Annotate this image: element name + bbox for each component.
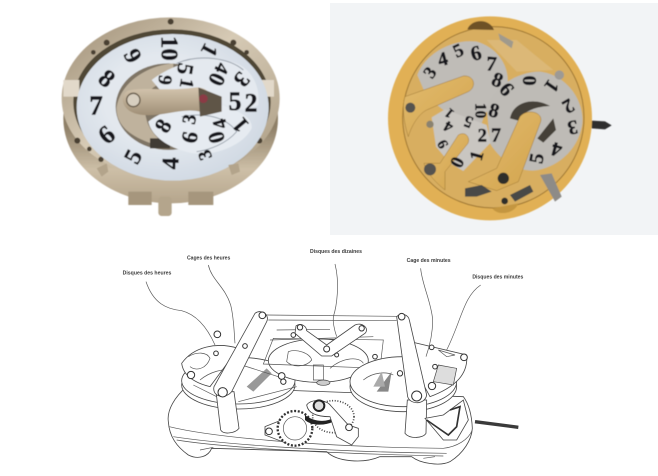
label: Disques des heures: Disques des heures (123, 271, 171, 277)
upper disc numerals: 6 (494, 79, 518, 101)
right disc numerals: 2 (558, 94, 578, 118)
gold arm upper left (403, 76, 474, 137)
keyless works at right (425, 400, 468, 440)
screws and steel parts (405, 33, 564, 204)
upper disc numerals: 7 (485, 53, 497, 76)
upper disc numerals: 10 (472, 103, 489, 119)
hexagon numerals: 9 (435, 136, 452, 151)
hour numerals: 10 (155, 36, 182, 61)
minute numerals: 6 (176, 130, 203, 145)
hour numerals: 6 (92, 120, 121, 150)
right disc numerals: 8 (486, 99, 502, 123)
right disc numerals (486, 75, 579, 165)
leader line: minute cage (421, 268, 433, 357)
dark aperture (510, 101, 556, 143)
minute numerals: 5 (172, 61, 199, 77)
upper disc numerals: 8 (489, 68, 506, 93)
hour numerals: 4 (158, 157, 185, 170)
hexagon numerals: 2 (478, 126, 487, 147)
left hour disc (182, 345, 297, 409)
hour numerals: 7 (89, 91, 103, 121)
centre tens disc (263, 329, 383, 385)
upper disc numerals: 3 (419, 63, 441, 82)
left long arm (214, 312, 267, 396)
minute numerals: 8 (149, 115, 177, 137)
leader line: tens discs (333, 264, 338, 337)
photo panel: gold movement on grey (330, 3, 658, 235)
hour numerals (89, 36, 223, 170)
Y-shaped centre bridge (295, 324, 367, 356)
disc edge shadows (177, 58, 243, 152)
left pillar (216, 392, 239, 433)
left silver hour disc (417, 41, 508, 123)
minute numerals: 0 (203, 129, 230, 146)
gold arm lower right (468, 112, 541, 191)
minute numerals: 9 (153, 74, 175, 86)
hour numerals: 5 (120, 146, 148, 168)
hexagon numerals: 4 (441, 117, 456, 136)
label: Disques des dizaines: Disques des dizaines (310, 249, 362, 255)
minute numerals: 1 (227, 113, 254, 138)
minute numerals: 2 (244, 89, 257, 118)
right silver minute disc (487, 72, 582, 171)
arm screws (187, 312, 467, 401)
right disc numerals: 5 (525, 152, 549, 165)
minute numerals: 3 (179, 113, 201, 126)
upper disc numerals: 6 (468, 42, 484, 66)
right disc numerals: 1 (539, 75, 563, 96)
hexagon numerals: 1 (442, 105, 457, 121)
lower number disc (148, 103, 252, 154)
threaded winding stem (475, 422, 518, 427)
hour numerals: 9 (118, 45, 146, 68)
dial lugs (97, 163, 240, 177)
white outer hour dial (77, 34, 269, 181)
hour numerals: 1 (196, 39, 223, 61)
outer bezel ring (62, 17, 280, 179)
label: Disques des minutes: Disques des minutes (472, 275, 523, 281)
central mechanism recess (116, 63, 221, 150)
right minute disc (350, 340, 467, 412)
photo: white dial watch movement (62, 17, 280, 216)
right long arm (397, 314, 427, 403)
label: Cage des minutes: Cage des minutes (407, 258, 451, 264)
minute numerals: 4 (209, 116, 232, 131)
label: Cages des heures: Cages des heures (187, 255, 230, 261)
bridge with ruby (123, 87, 222, 117)
top connecting bar (267, 315, 397, 321)
base plate (168, 387, 472, 464)
right disc numerals: 3 (566, 115, 579, 139)
minute numerals: 0 (203, 69, 231, 90)
gold plate (388, 16, 592, 220)
leader line: minute discs (447, 285, 481, 350)
hexagon numerals: 5 (461, 111, 475, 132)
upper number disc (152, 59, 259, 110)
leader line: hour discs (146, 282, 215, 345)
minute numerals (149, 59, 257, 146)
hour numerals: 8 (93, 64, 120, 94)
central regulator with gears (265, 400, 358, 446)
minute numerals: 3 (229, 67, 255, 92)
crown stem (592, 121, 612, 129)
minute numerals: 4 (209, 59, 233, 77)
hour numerals: 3 (194, 147, 217, 163)
gold arm lower left (424, 134, 469, 190)
hexagonal tens disc (432, 109, 491, 171)
grey backdrop (330, 3, 658, 235)
right pillar (405, 400, 427, 437)
upper disc numerals (419, 40, 518, 119)
minute numerals: 5 (228, 87, 241, 116)
leader line: hour cages (208, 265, 235, 343)
upper disc numerals: 5 (450, 40, 467, 63)
right disc numerals: 4 (549, 137, 564, 161)
right disc numerals: 0 (518, 76, 540, 86)
right disc numerals: 7 (491, 124, 501, 146)
minute numerals: 1 (175, 77, 197, 90)
hexagon numerals: 0 (446, 154, 469, 171)
hexagon numerals: 1 (466, 149, 488, 163)
upper disc numerals: 4 (435, 49, 451, 71)
hexagon numerals (435, 105, 488, 171)
annotated line diagram of the mechanism (123, 249, 523, 464)
watch body lower edge (63, 33, 278, 216)
